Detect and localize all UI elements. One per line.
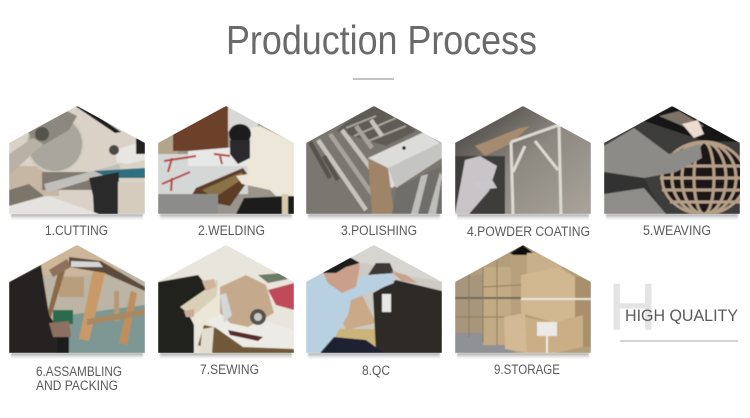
large letter H: H bbox=[608, 270, 657, 345]
shadow bbox=[308, 214, 440, 220]
photo: cutting saw bbox=[9, 106, 145, 214]
panel: QC bbox=[306, 245, 442, 378]
label: 9.STORAGE bbox=[494, 362, 560, 377]
panel: high quality bbox=[608, 270, 738, 345]
panel: welding bbox=[158, 106, 294, 238]
high quality text: HIGH QUALITY bbox=[625, 306, 738, 325]
shadow bbox=[11, 353, 143, 359]
panel: cutting bbox=[9, 106, 145, 238]
shadow bbox=[457, 214, 589, 220]
shadow bbox=[457, 353, 589, 359]
photo: sewing bbox=[158, 245, 294, 353]
label: 4.POWDER COATING bbox=[467, 224, 590, 239]
panel: assembling and packing bbox=[9, 245, 145, 393]
panel: storage bbox=[455, 245, 591, 377]
photo: assembling bbox=[9, 245, 145, 353]
photo: weaving bbox=[604, 106, 748, 216]
shadow bbox=[160, 214, 292, 220]
label: 8.QC bbox=[362, 363, 390, 378]
photo: polishing bbox=[306, 106, 442, 214]
photo: welding bbox=[158, 106, 294, 214]
shadow bbox=[160, 353, 292, 359]
photo: powder coating bbox=[455, 106, 591, 214]
shadow bbox=[308, 353, 440, 359]
photo: storage cartons bbox=[455, 245, 591, 353]
shadow bbox=[11, 214, 143, 220]
underline bbox=[620, 340, 738, 342]
label: 1.CUTTING bbox=[45, 223, 108, 238]
label line 2: AND PACKING bbox=[36, 378, 118, 393]
shadow bbox=[606, 214, 738, 220]
panel: polishing bbox=[306, 106, 442, 238]
panel: sewing bbox=[158, 245, 294, 377]
title underline bbox=[353, 78, 394, 80]
photo: QC inspection bbox=[306, 245, 442, 353]
title: Production Process bbox=[226, 17, 537, 63]
label: 5.WEAVING bbox=[643, 223, 711, 238]
label: 3.POLISHING bbox=[341, 223, 417, 238]
panel: weaving bbox=[604, 106, 748, 238]
label: 6.ASSAMBLING bbox=[36, 364, 122, 379]
panel: powder coating bbox=[455, 106, 591, 239]
label: 2.WELDING bbox=[198, 223, 265, 238]
label: 7.SEWING bbox=[200, 362, 259, 377]
